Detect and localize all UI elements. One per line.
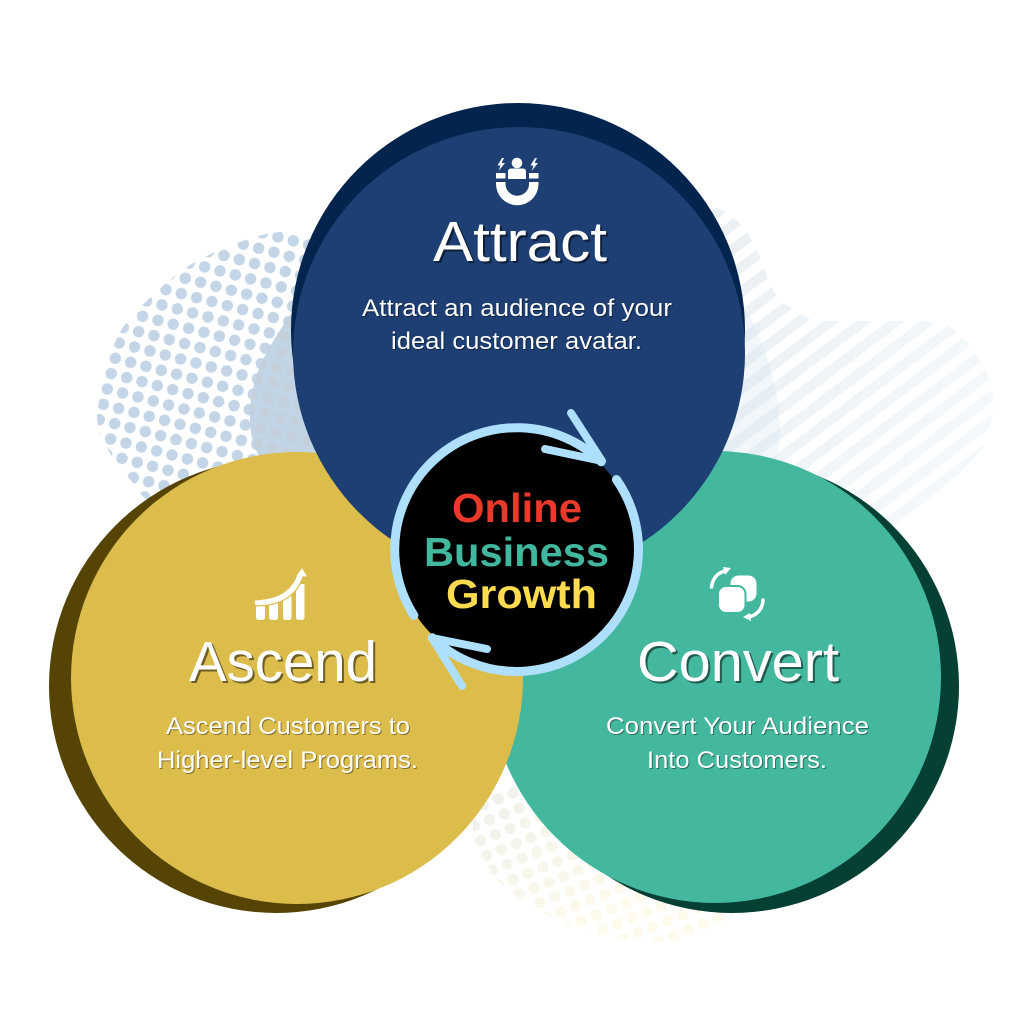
center hub: black disc	[396, 430, 636, 670]
panel: convert circle	[489, 451, 959, 913]
title: Online Business Growth: Online	[452, 485, 582, 531]
convert circle shadow	[505, 459, 959, 913]
ascend circle face	[71, 452, 523, 904]
text: attract description	[362, 295, 672, 355]
text: attract description: ideal customer avatar.	[391, 328, 642, 355]
text: ascend description: Ascend Customers to	[166, 713, 410, 740]
background blob: striped pale blue	[711, 207, 993, 526]
background blob: dotted blue	[97, 232, 360, 520]
text: convert description: Convert Your Audience	[606, 713, 869, 740]
title: Online Business Growth	[424, 485, 609, 617]
attract circle shadow	[291, 103, 745, 557]
attract circle face	[293, 127, 745, 579]
convert circle face	[489, 451, 941, 903]
text: convert description: Into Customers.	[647, 747, 827, 774]
icon: magnet attracting person	[496, 158, 538, 205]
heading: Attract: Attract	[433, 210, 607, 274]
heading: Ascend: Ascend	[189, 630, 377, 694]
title: Online Business Growth: Growth	[446, 571, 597, 617]
icon: rising bar chart	[254, 567, 308, 620]
ascend circle shadow	[49, 459, 503, 913]
title: Online Business Growth: Business	[424, 529, 609, 575]
icon: convert swap squares	[712, 567, 763, 621]
background blob: pale central gradient	[250, 307, 780, 458]
text: ascend description	[157, 713, 418, 774]
text: attract description: Attract an audience of your	[362, 295, 672, 322]
text: convert description	[606, 713, 869, 774]
heading: Convert: Convert	[637, 630, 839, 694]
arrow: circular cycle ring	[395, 413, 638, 686]
text: ascend description: Higher-level Programs.	[157, 747, 418, 774]
panel: ascend circle	[49, 452, 523, 913]
panel: attract circle	[291, 103, 745, 579]
background blob: dotted pale yellow	[473, 788, 733, 942]
